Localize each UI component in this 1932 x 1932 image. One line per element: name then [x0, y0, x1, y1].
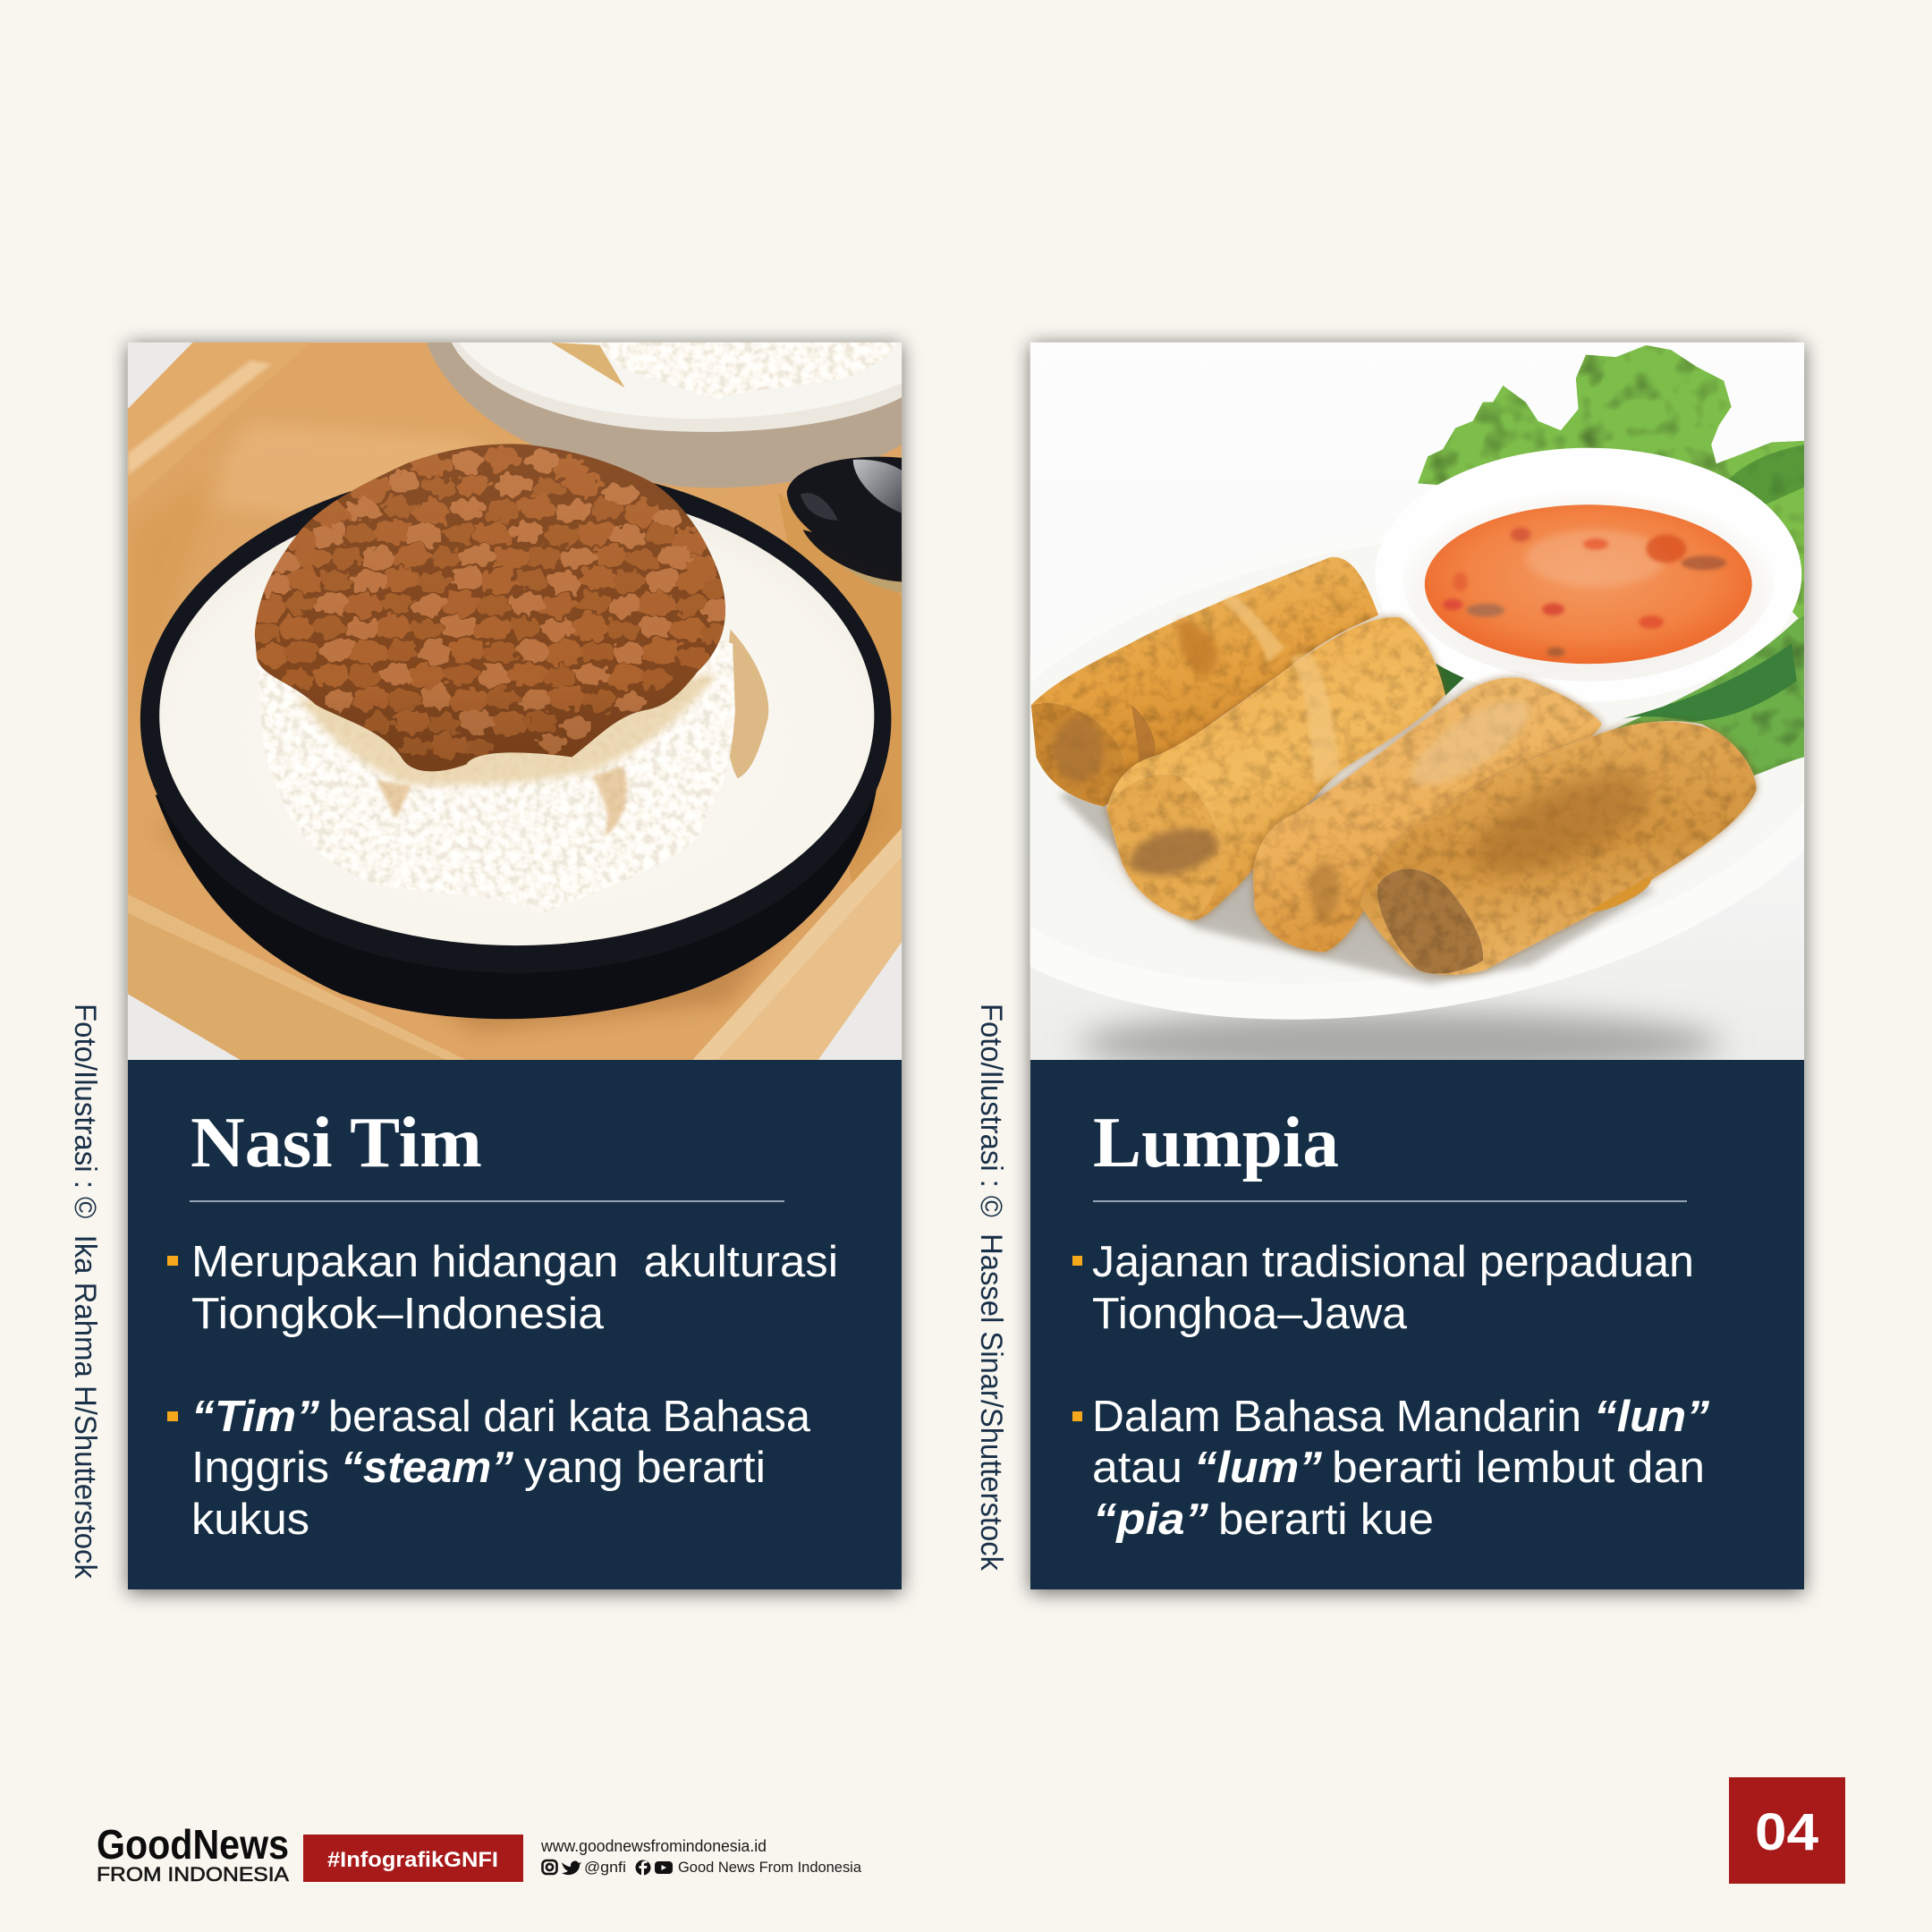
photo: lumpia with dipping sauce — [1030, 342, 1805, 1061]
roll 1 — [1031, 557, 1378, 807]
text block: bullet 1: Tionghoa–Jawa — [1092, 1290, 1408, 1338]
hashtag badge — [303, 1835, 523, 1882]
text block: bullet 2: “Tim” — [191, 1393, 320, 1441]
spoon — [787, 457, 902, 593]
photo credit: right: Foto/Ilustrasi : © Hassel Sinar/Shutterstock — [974, 1004, 1008, 1572]
text block: bullet 2: “pia” — [1093, 1496, 1209, 1544]
plate — [140, 465, 891, 973]
roll 4 — [1360, 722, 1757, 975]
plate underside — [156, 776, 878, 1019]
panel: Lumpia card — [1030, 342, 1805, 1589]
roll 3 — [1253, 677, 1602, 952]
text block: bullet 1: Tiongkok–Indonesia — [191, 1290, 605, 1338]
text block: bullet 2: kukus — [191, 1496, 309, 1544]
footer logo: GoodNews from Indonesia — [97, 1821, 289, 1885]
footer logo: GoodNews from Indonesia: GoodNews — [97, 1821, 289, 1868]
card shadow: right — [1030, 344, 1804, 1593]
heading: Nasi Tim: Nasi Tim — [191, 1104, 482, 1182]
photo: nasi tim on a wooden tray — [127, 342, 902, 1060]
bowl — [1375, 448, 1801, 701]
panel: Lumpia text background — [1030, 1060, 1804, 1589]
text block: bullet 2: berarti lembut dan — [1332, 1444, 1705, 1492]
text block: bullet 2: Dalam Bahasa Mandarin — [1092, 1393, 1581, 1441]
icon: youtube — [655, 1861, 673, 1874]
sauce — [1425, 504, 1752, 664]
icon: twitter — [562, 1860, 581, 1875]
card shadow: left — [128, 344, 902, 1593]
icon: facebook — [635, 1860, 651, 1876]
footer website and social — [540, 1837, 862, 1876]
text block: bullet 1: Merupakan hidangan akulturasi — [191, 1238, 838, 1286]
panel: Nasi Tim text background — [128, 1060, 902, 1589]
text block: bullet 2: berasal dari kata Bahasa — [328, 1393, 811, 1441]
back bowl — [427, 343, 902, 487]
heading: Lumpia: Lumpia — [1093, 1104, 1339, 1182]
footer website and social: Good News From Indonesia — [678, 1859, 862, 1876]
text block: bullet 1 — [167, 1238, 838, 1338]
text block: bullet 2: “lun” — [1594, 1393, 1710, 1441]
text block: bullet 1 — [1072, 1238, 1694, 1338]
hashtag badge: #InfografikGNFI — [327, 1848, 498, 1872]
page number badge — [1729, 1777, 1845, 1884]
text block: bullet 2: yang berarti — [524, 1444, 766, 1492]
roll 2 — [1106, 617, 1445, 920]
panel: Nasi Tim card — [125, 331, 912, 1589]
text block: bullet 2: atau — [1092, 1444, 1182, 1492]
text block: bullet 2: “steam” — [341, 1444, 514, 1492]
plate — [1030, 592, 1805, 1020]
footer logo: GoodNews from Indonesia: FROM INDONESIA — [97, 1863, 289, 1885]
text block: bullet 2: Inggris — [191, 1444, 329, 1492]
text block: bullet 2: berarti kue — [1218, 1496, 1434, 1544]
icon: instagram — [542, 1860, 556, 1874]
text block: bullet 2 — [167, 1393, 811, 1544]
meat topping — [254, 444, 725, 771]
sauce — [725, 629, 768, 778]
footer website and social: www.goodnewsfromindonesia.id — [540, 1837, 767, 1855]
footer website and social: @gnfi — [584, 1859, 626, 1876]
page number badge: 04 — [1755, 1803, 1818, 1861]
text block: bullet 2 — [1072, 1393, 1710, 1544]
text block: bullet 1: Jajanan tradisional perpaduan — [1092, 1238, 1694, 1286]
lettuce — [1418, 345, 1804, 624]
text block: bullet 2: “lum” — [1194, 1444, 1323, 1492]
photo credit: left: Foto/Ilustrasi : © Ika Rahma H/Shutterstock — [68, 1004, 102, 1580]
rice — [257, 641, 735, 912]
shadows under rolls — [1059, 757, 1657, 984]
